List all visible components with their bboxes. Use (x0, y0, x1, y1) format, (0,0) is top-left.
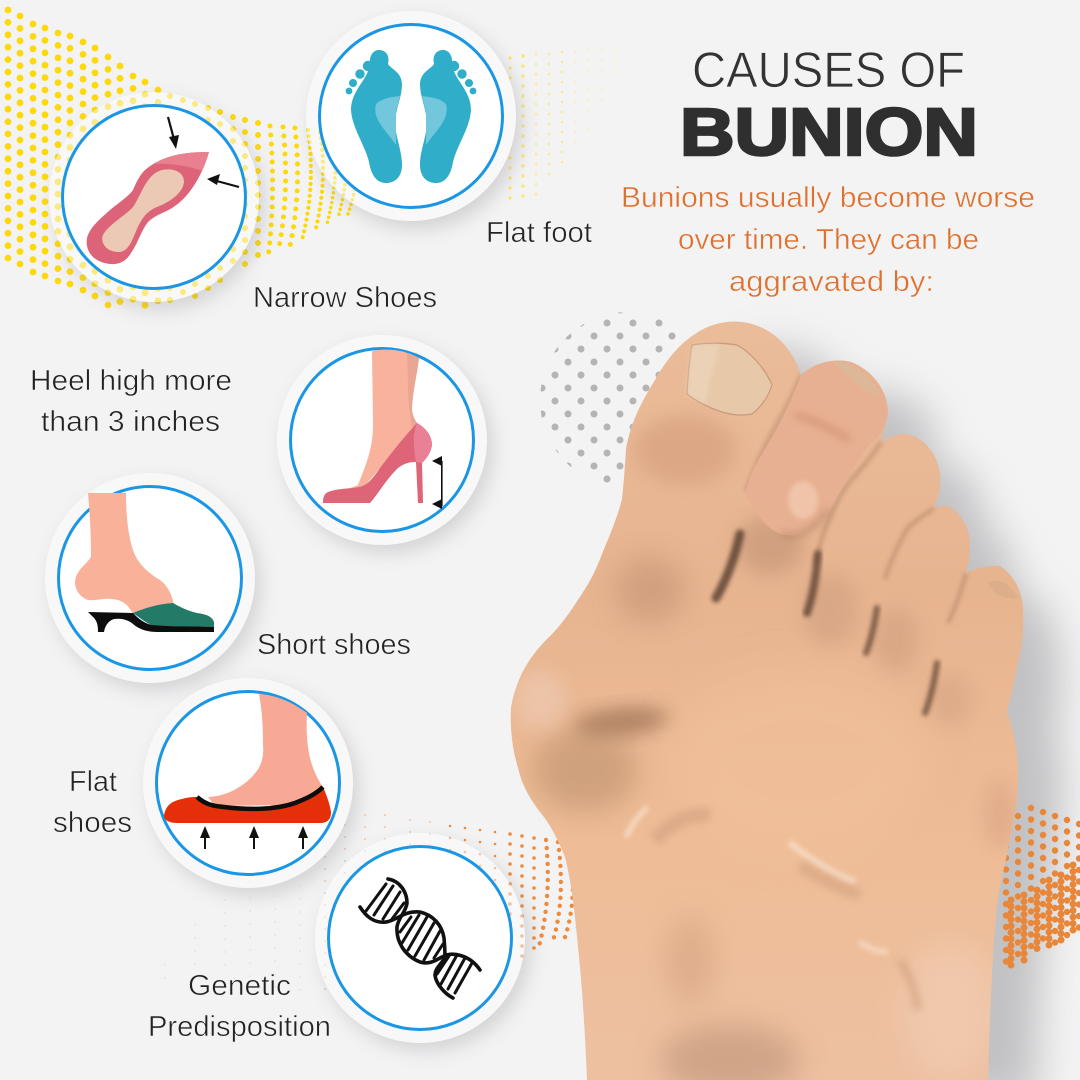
subtitle text: over time. They can be (678, 224, 979, 256)
subtitle text (621, 182, 1035, 298)
orange halftone band right (1006, 808, 1079, 966)
label: Genetic Predisposition: Predisposition (148, 1011, 331, 1043)
circle: flat shoes (143, 678, 359, 896)
faint yellow dots right of the foot circle (510, 50, 616, 205)
circle: genetic predisposition (316, 834, 536, 1056)
tendon ridges (626, 807, 648, 837)
label: Heel high more than 3 inches (30, 365, 232, 438)
label: Heel high more than 3 inches: Heel high more (30, 365, 232, 397)
circle: short shoes (45, 473, 261, 691)
label: Genetic Predisposition (148, 970, 331, 1043)
icon: height bracket (432, 456, 443, 509)
yellow halftone wave (8, 10, 356, 310)
foot shading (514, 375, 1016, 1080)
icon: leg in stiletto (323, 350, 432, 503)
gray halftone circle (540, 312, 716, 488)
label: Short shoes: Short shoes (257, 629, 411, 661)
label: Heel high more than 3 inches: than 3 inches (41, 406, 220, 438)
icon: upward arrows (200, 826, 308, 849)
foot base shape (511, 322, 1023, 1080)
gap shadows between toes (716, 534, 740, 598)
second toe with raised knuckle (746, 361, 888, 536)
subtitle text: aggravated by: (729, 266, 934, 298)
icon: foot on short shoe (75, 493, 214, 632)
little toe nail (988, 581, 1018, 598)
label: Flat foot: Flat foot (486, 217, 592, 249)
circle: narrow shoes (50, 92, 272, 315)
label: Flat shoes: Flat (69, 766, 117, 798)
icon: foot in flat shoe (164, 694, 331, 823)
label: Narrow Shoes: Narrow Shoes (253, 282, 437, 314)
circle: high heel (277, 335, 493, 553)
icon: pointed shoe top view (87, 152, 209, 264)
big toe nail (687, 343, 772, 415)
bunion foot photo (511, 322, 1023, 1080)
toe shading (640, 498, 740, 500)
title: BUNION (680, 95, 978, 170)
title: CAUSES OF (692, 42, 965, 98)
orange halftone band lower left (165, 815, 583, 998)
toe separating creases (746, 375, 801, 491)
label: Flat shoes: shoes (53, 807, 132, 839)
label: Genetic Predisposition: Genetic (188, 970, 291, 1002)
subtitle text: Bunions usually become worse (621, 182, 1035, 214)
foot cast shadow (567, 348, 1062, 1080)
label: Flat shoes (53, 766, 132, 839)
circle: flat foot (306, 20, 528, 234)
icon: DNA helix (360, 879, 480, 998)
title (680, 42, 978, 170)
icon: squeeze arrows (168, 117, 239, 187)
icon: footprints (346, 50, 476, 183)
